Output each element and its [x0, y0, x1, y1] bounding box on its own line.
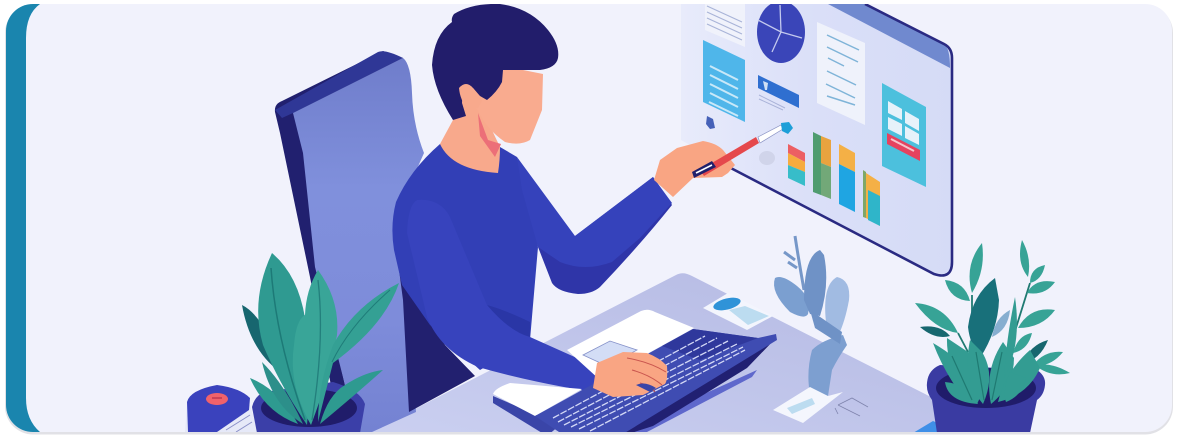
curled join: [810, 310, 842, 344]
pen tip: [781, 122, 793, 134]
lower leaf shading: [952, 352, 1002, 400]
pointing hand: [654, 141, 735, 197]
dark leaves: [920, 326, 1048, 363]
jar button: [206, 393, 228, 405]
pen dark grip: [692, 161, 716, 178]
left potted plant: [242, 253, 399, 433]
small sprig: [784, 236, 804, 290]
glasses: [835, 398, 868, 416]
pen white shaft: [758, 125, 783, 143]
document right: [817, 22, 865, 125]
pie chart: [757, 1, 805, 63]
lower leaf fan: [933, 297, 1040, 404]
torso: [392, 144, 538, 370]
right leaf vein: [332, 290, 390, 362]
near hand on keyboard: [593, 352, 667, 397]
jar button slot: [212, 397, 222, 399]
tablet: [583, 341, 637, 366]
lower right leaf: [320, 370, 383, 424]
neck: [440, 100, 500, 173]
keyboard deck: [535, 329, 777, 436]
keys: [553, 336, 745, 431]
jar body: [185, 405, 258, 432]
right leaf: [318, 283, 399, 422]
faint circle icon: [759, 151, 775, 165]
white paper pad: [567, 310, 694, 380]
right potted plant: [915, 240, 1070, 433]
far arm shadow: [538, 177, 672, 294]
lower left leaf: [250, 378, 298, 424]
far arm sleeve: [517, 157, 672, 267]
ear: [459, 84, 477, 101]
chair top edge: [275, 51, 403, 118]
face: [473, 70, 543, 144]
person: [392, 4, 672, 412]
upper leaves: [915, 240, 1070, 374]
screen dark edge: [725, 4, 952, 276]
desk: [372, 273, 936, 432]
laptop dark lid: [626, 344, 770, 432]
large leaf vein: [271, 268, 305, 420]
paper note at plant base: [773, 387, 843, 423]
pot inside: [936, 368, 1036, 408]
chair back: [293, 58, 424, 432]
paper note on desk: [703, 293, 773, 330]
chair: [275, 51, 424, 432]
pot: [927, 365, 1045, 433]
jar: [185, 385, 258, 432]
big dark leaf: [968, 278, 999, 358]
keyboard top strip: [662, 329, 758, 360]
laptop: [493, 310, 777, 436]
neck shadow: [478, 113, 501, 157]
right leaf: [825, 277, 849, 336]
blue banner: [758, 75, 799, 110]
hair: [432, 4, 558, 120]
teal accent bar: [6, 4, 40, 432]
blue book under pot: [913, 421, 960, 433]
lower mid leaf: [262, 362, 303, 424]
blue desk plant: [774, 236, 849, 396]
document top left: [705, 4, 745, 47]
torso fold shadow: [487, 305, 530, 338]
torso dark underside: [400, 274, 475, 412]
raised hand with pen: [654, 122, 793, 197]
left leaf: [774, 277, 809, 317]
desk shadow under laptop: [634, 370, 757, 432]
teal info card: [882, 83, 926, 187]
tall leaf: [804, 250, 826, 316]
near arm: [431, 306, 595, 390]
plant stem: [808, 335, 847, 396]
chair dark edge: [274, 51, 403, 386]
screen top band: [828, 4, 950, 68]
jar label lines: [226, 415, 252, 432]
bar chart: [788, 132, 880, 226]
large leaf: [258, 253, 309, 425]
centre leaf vein: [312, 280, 320, 420]
small icon on screen: [706, 116, 715, 129]
jar lid: [187, 385, 250, 432]
blue text card: [703, 40, 745, 122]
screen panel: [681, 4, 952, 276]
pen barrel: [700, 137, 759, 176]
pen grip highlight: [696, 165, 712, 173]
pot: [252, 382, 365, 433]
white palm pad: [493, 383, 582, 416]
pot inside: [261, 389, 357, 427]
laptop base edge: [493, 396, 555, 432]
wall screen dashboard: [681, 1, 952, 276]
dark back leaf: [242, 305, 280, 372]
pale leaf: [992, 310, 1010, 337]
centre leaf: [293, 270, 337, 425]
plant stems: [958, 283, 1030, 352]
